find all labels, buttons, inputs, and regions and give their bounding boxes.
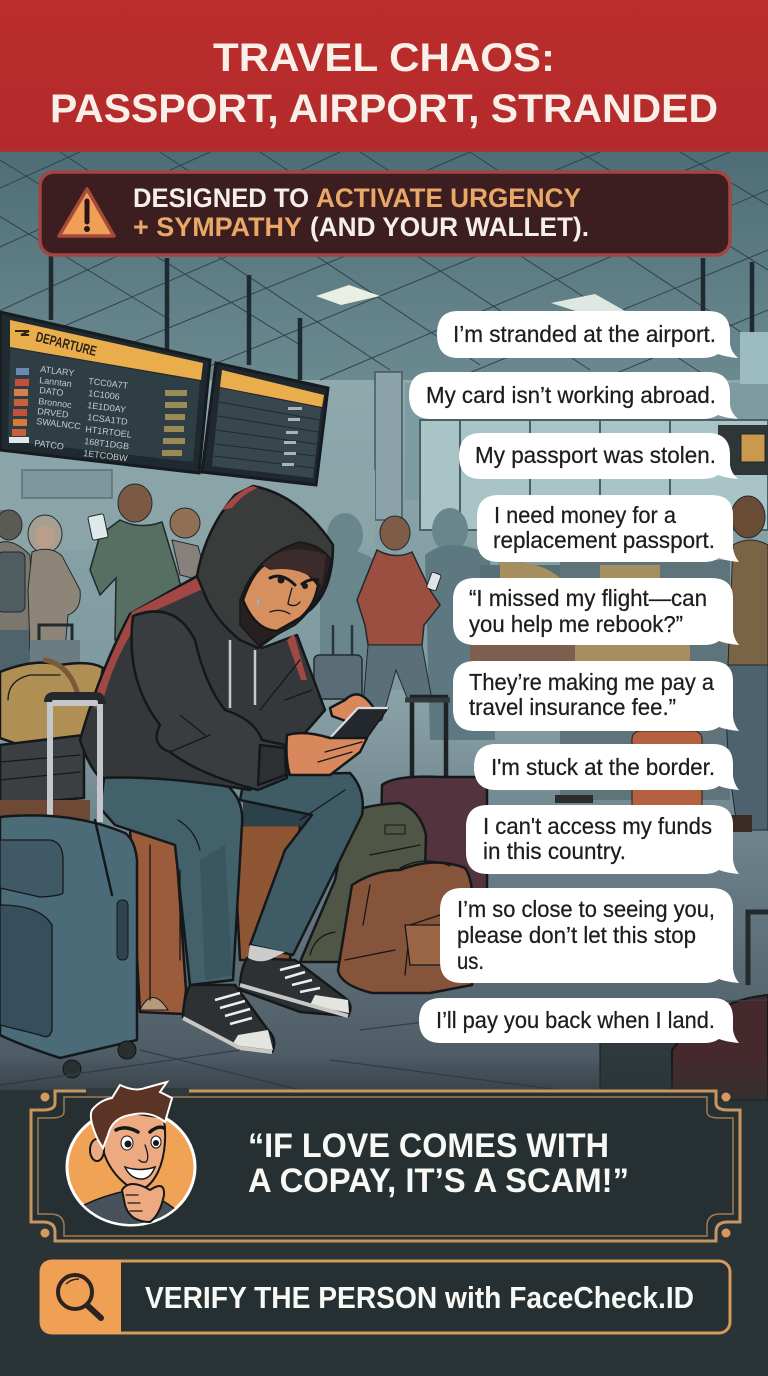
main departures board: Lanntan xyxy=(39,375,72,389)
main departures board: DEPARTURE xyxy=(34,328,98,359)
far shoe xyxy=(240,945,350,1016)
brown trunk under traveller xyxy=(130,825,300,1014)
bubble: replacement passport xyxy=(477,495,739,562)
bubble: stranded xyxy=(437,311,738,358)
icon: magnifying glass xyxy=(58,1275,101,1318)
main departures board: SWALNCC xyxy=(36,416,82,431)
main departures board: 168T1DGB xyxy=(84,436,130,451)
hood xyxy=(197,486,333,648)
distant suitcase xyxy=(314,625,362,699)
bubble: so close: please don’t let this stop xyxy=(457,922,696,948)
foreground luggage right xyxy=(600,912,768,1100)
hoodie torso xyxy=(80,576,325,790)
bubble: replacement passport: I need money for a xyxy=(494,502,676,528)
bubble: insurance fee xyxy=(453,661,739,731)
main departures board: ATLARY xyxy=(40,364,75,378)
main departures board: 1E1D0AY xyxy=(87,400,127,415)
bubble: so close: I’m so close to seeing you, xyxy=(457,896,715,922)
bubble: so close: us. xyxy=(457,948,484,974)
bubble: insurance fee: travel insurance fee.” xyxy=(469,694,676,720)
quote text: “IF LOVE COMES WITH xyxy=(248,1127,609,1165)
main departures board: 1CSA1TD xyxy=(87,412,129,427)
departure boards xyxy=(0,312,328,485)
bubble: passport stolen xyxy=(459,433,738,479)
main departures board: DATO xyxy=(39,385,64,398)
icon: warning triangle xyxy=(59,189,114,236)
quote panel xyxy=(31,1082,740,1241)
bubble: border: I'm stuck at the border. xyxy=(491,754,715,780)
main departures board: PATCO xyxy=(34,438,64,452)
near shoe xyxy=(183,985,274,1052)
avatar: smiling man thinking xyxy=(67,1082,195,1230)
near leg xyxy=(100,767,242,985)
banner text: DESIGNED TO xyxy=(133,183,309,213)
main departures board: Bronnoc xyxy=(38,396,73,410)
banner text: ACTIVATE URGENCY xyxy=(316,183,581,213)
seat shadow under thighs xyxy=(243,798,315,826)
title: TRAVEL CHAOS: xyxy=(213,36,555,80)
traveller: woman with fur hood xyxy=(28,515,80,650)
luggage behind traveller xyxy=(0,660,487,1014)
bubble: funds: in this country. xyxy=(483,838,626,864)
bubble: border xyxy=(474,744,739,790)
verify call-to-action bar xyxy=(40,1260,730,1334)
maroon suitcase xyxy=(380,697,487,890)
bubble: stranded: I’m stranded at the airport. xyxy=(453,321,716,347)
title xyxy=(50,36,718,131)
banner text: (AND YOUR WALLET). xyxy=(310,212,589,242)
traveller: brown-haired woman xyxy=(170,508,208,582)
traveller: left with backpack xyxy=(0,510,35,700)
tan duffel bag xyxy=(0,660,103,745)
main departures board: 1ETCOBW xyxy=(83,448,129,463)
airport background scene xyxy=(0,150,768,1090)
bubble: card xyxy=(409,372,738,419)
bubble: missed flight: you help me rebook?” xyxy=(469,611,683,637)
blue hard-shell suitcase xyxy=(0,696,137,1078)
bubble: replacement passport: replacement passport. xyxy=(493,527,715,553)
main departures board xyxy=(0,312,210,473)
title: PASSPORT, AIRPORT, STRANDED xyxy=(50,87,718,131)
far leg xyxy=(240,773,363,955)
brown duffel xyxy=(338,861,472,993)
speech bubbles xyxy=(409,311,739,1043)
face xyxy=(243,549,326,631)
verify text: VERIFY THE PERSON with FaceCheck.ID xyxy=(145,1281,694,1315)
banner text xyxy=(133,183,589,242)
background travellers xyxy=(0,484,768,832)
main figure: stressed traveller in hoodie xyxy=(80,486,388,1052)
main departures board: DRVED xyxy=(37,406,70,420)
stacked dark bags xyxy=(0,735,90,820)
quote text: A COPAY, IT’S A SCAM!” xyxy=(248,1162,629,1200)
bubble: card: My card isn’t working abroad. xyxy=(426,382,716,408)
secondary board xyxy=(202,363,328,485)
traveller: right with backpack xyxy=(726,496,768,832)
banner text: + SYMPATHY xyxy=(133,212,302,242)
bubble: passport stolen: My passport was stolen. xyxy=(475,442,716,468)
quote text xyxy=(248,1127,629,1200)
main departures board: 1C1006 xyxy=(88,388,120,402)
bubble: funds: I can't access my funds xyxy=(483,813,712,839)
near arm xyxy=(132,611,287,790)
bubble: pay back: I’ll pay you back when I land. xyxy=(436,1007,715,1033)
bubble: missed flight xyxy=(453,578,739,645)
hands and phone xyxy=(286,694,388,775)
bubble: pay back xyxy=(419,998,739,1043)
header band xyxy=(0,0,768,152)
bubble: so close xyxy=(440,888,739,983)
traveller: green jacket with phone xyxy=(88,484,184,700)
bubble: insurance fee: They’re making me pay a xyxy=(469,669,714,695)
main departures board: TCC0A7T xyxy=(88,376,129,391)
main departures board: HT1RTOEL xyxy=(85,424,132,440)
distant crowd silhouettes xyxy=(0,508,730,851)
bubble: missed flight: “I missed my flight—can xyxy=(469,585,707,611)
bubble: funds xyxy=(466,805,739,874)
olive bag xyxy=(300,803,426,962)
traveller: red hoodie xyxy=(357,516,441,720)
bottom dark fade xyxy=(0,1055,768,1125)
warning banner xyxy=(40,172,730,255)
floor tile lines xyxy=(0,1000,768,1090)
